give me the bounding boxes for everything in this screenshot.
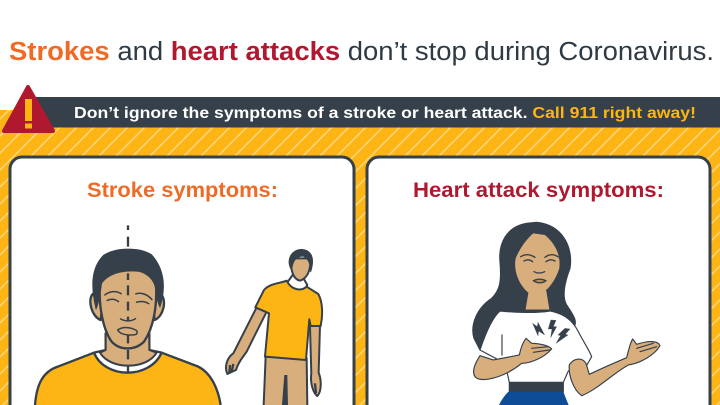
illustration: woman clutching chest (473, 222, 660, 405)
right arm (310, 326, 321, 396)
head (291, 258, 311, 281)
neck (525, 290, 550, 310)
hands (229, 364, 316, 393)
hair (289, 249, 313, 272)
icon: pain bolts (533, 320, 570, 343)
facial features (521, 255, 558, 283)
shirt (255, 281, 322, 360)
neck and collar (94, 333, 162, 373)
heading: stroke symptoms: Stroke symptoms: (87, 179, 278, 202)
face (515, 233, 560, 295)
icon: warning triangle (4, 87, 53, 131)
illustration: man with weak arm (226, 249, 322, 405)
midline dashes (124, 225, 131, 373)
striped yellow background (0, 110, 720, 405)
inner leg gap (282, 375, 288, 405)
eyebrows, eyes, nose, mouth (104, 292, 152, 335)
ears (90, 294, 164, 320)
trousers (264, 357, 307, 405)
illustration: man with drooping face (35, 225, 221, 405)
shirt (35, 353, 221, 405)
left arm (226, 307, 267, 374)
face (100, 268, 156, 348)
warning banner (35, 97, 720, 128)
panel: heart attack symptoms (367, 157, 710, 405)
hair (93, 249, 164, 309)
left arm and hand (474, 338, 552, 380)
right arm and hand (569, 339, 660, 396)
title: Strokes and heart attacks don’t stop during Coronavirus. (9, 38, 714, 66)
finger lines (532, 343, 657, 352)
heading: heart attack symptoms: Heart attack symptoms: (413, 179, 664, 202)
waistband (509, 382, 563, 391)
neck (287, 275, 307, 291)
panel: stroke symptoms (10, 157, 354, 405)
top (480, 311, 592, 382)
banner text: Don’t ignore the symptoms of a stroke or heart attack. Call 911 right away! (74, 105, 696, 122)
skirt (499, 391, 569, 405)
hair (473, 222, 575, 350)
